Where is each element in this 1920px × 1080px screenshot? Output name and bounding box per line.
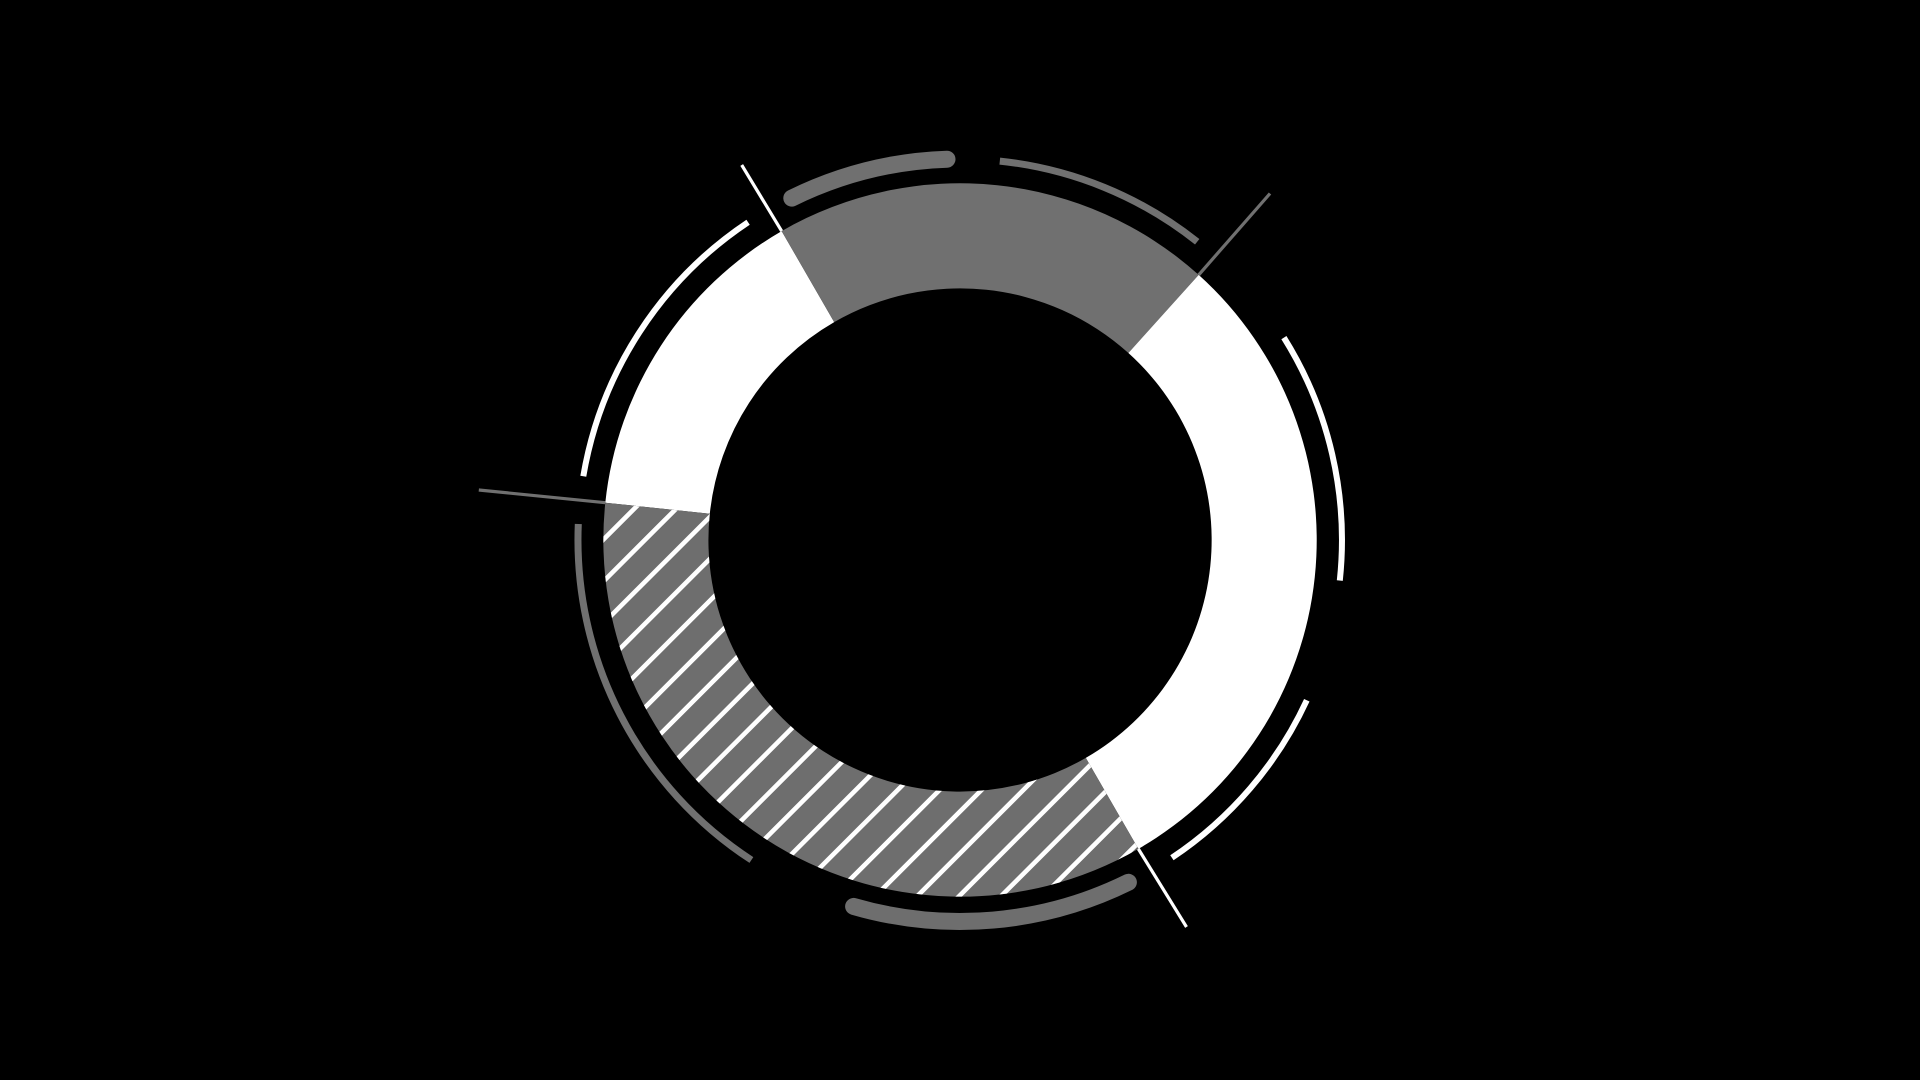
- spoke: white lower right: [1138, 849, 1186, 927]
- outer arc: thick gray top: [792, 159, 947, 198]
- spoke: gray upper right: [1199, 194, 1270, 275]
- donut chart infographic: [478, 150, 1345, 930]
- outer arc: white right: [1284, 338, 1342, 581]
- segment: white upper left: [605, 231, 834, 514]
- outer arc: thin gray left: [578, 524, 751, 860]
- segment: gray top: [782, 183, 1199, 353]
- segment: white right: [1086, 275, 1317, 849]
- spoke: white upper left: [742, 165, 782, 231]
- outer arc: white lower right: [1172, 700, 1307, 858]
- donut ring: [603, 183, 1317, 897]
- outer arc: white upper left: [583, 222, 748, 476]
- outer arc: thin gray top right: [1000, 161, 1197, 242]
- spoke: gray left: [479, 490, 605, 503]
- outer arc: thick gray bottom: [854, 882, 1128, 922]
- segment: hatched bottom left: [603, 502, 1138, 897]
